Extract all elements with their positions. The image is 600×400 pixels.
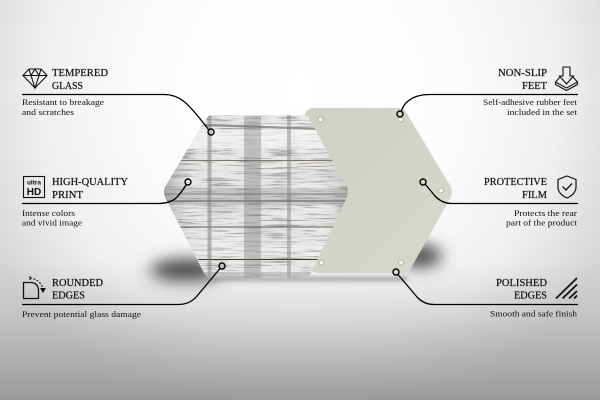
shadow: front hexagon — [150, 259, 222, 281]
mounting holes — [318, 117, 444, 265]
icon: ultra HD: ultra — [27, 180, 41, 186]
edge shading — [164, 154, 348, 260]
icon: non-slip feet — [556, 67, 578, 90]
icon: shield — [558, 176, 576, 198]
heading: non-slip feet — [498, 68, 548, 92]
heading: protective film — [484, 177, 548, 201]
heading: tempered glass: GLASS — [52, 81, 83, 92]
wood grain — [160, 112, 355, 282]
heading: non-slip feet: NON-SLIP — [498, 68, 547, 79]
text: high-quality print description: Intense colors — [22, 208, 75, 218]
heading: high-quality print: HIGH-QUALITY — [52, 177, 128, 188]
shadow: back hexagon — [398, 245, 442, 267]
heading: non-slip feet: FEET — [522, 81, 548, 92]
text: tempered glass description — [22, 97, 104, 117]
heading: polished edges: POLISHED — [496, 278, 547, 289]
callout line: high-quality print — [22, 179, 191, 204]
text: tempered glass description: Resistant to breakage — [22, 97, 104, 107]
icon: polished edges — [556, 278, 577, 298]
bright upper plank — [188, 130, 326, 148]
text: rounded edges description: Prevent potential glass damage — [22, 309, 141, 319]
callout line: polished edges — [393, 269, 578, 304]
heading: tempered glass: TEMPERED — [52, 68, 108, 79]
heading: protective film: FILM — [522, 190, 548, 201]
icon: ultra HD: HD — [27, 187, 41, 198]
window reflection bands — [208, 112, 291, 282]
heading: high-quality print: PRINT — [52, 190, 84, 201]
heading: rounded edges — [52, 278, 103, 302]
heading: rounded edges: EDGES — [52, 290, 85, 302]
front glass panel: wood planks — [160, 112, 355, 282]
callout line: rounded edges — [22, 263, 225, 304]
text: high-quality print description: and vivid image — [22, 218, 82, 228]
heading: protective film: PROTECTIVE — [484, 177, 547, 188]
back panel — [268, 108, 452, 273]
text: high-quality print description — [22, 208, 82, 228]
plank seams — [160, 125, 355, 260]
heading: polished edges — [496, 278, 547, 302]
text: protective film description — [506, 208, 578, 228]
text: non-slip feet description: included in the set — [507, 107, 578, 117]
icon: diamond — [23, 69, 47, 88]
text: protective film description: part of the product — [506, 218, 578, 228]
floor shadow under panels — [207, 277, 407, 281]
heading: tempered glass — [52, 68, 108, 92]
heading: polished edges: EDGES — [514, 290, 547, 302]
callout line: protective film — [420, 179, 578, 204]
icon: rounded edges — [24, 276, 45, 298]
wood mottling — [178, 115, 339, 262]
icon: ultra HD — [24, 176, 44, 198]
heading: rounded edges: ROUNDED — [52, 278, 103, 289]
text: non-slip feet description: Self-adhesive rubber feet — [483, 97, 578, 107]
heading: high-quality print — [52, 177, 128, 201]
text: tempered glass description: and scratches — [22, 107, 74, 117]
text: protective film description: Protects the rear — [514, 208, 577, 218]
text: polished edges description: Smooth and safe finish — [490, 308, 578, 318]
darker centre plank — [160, 188, 355, 205]
text: non-slip feet description — [483, 97, 578, 117]
callout line: tempered glass — [22, 94, 214, 135]
callout line: non-slip feet — [397, 94, 578, 117]
